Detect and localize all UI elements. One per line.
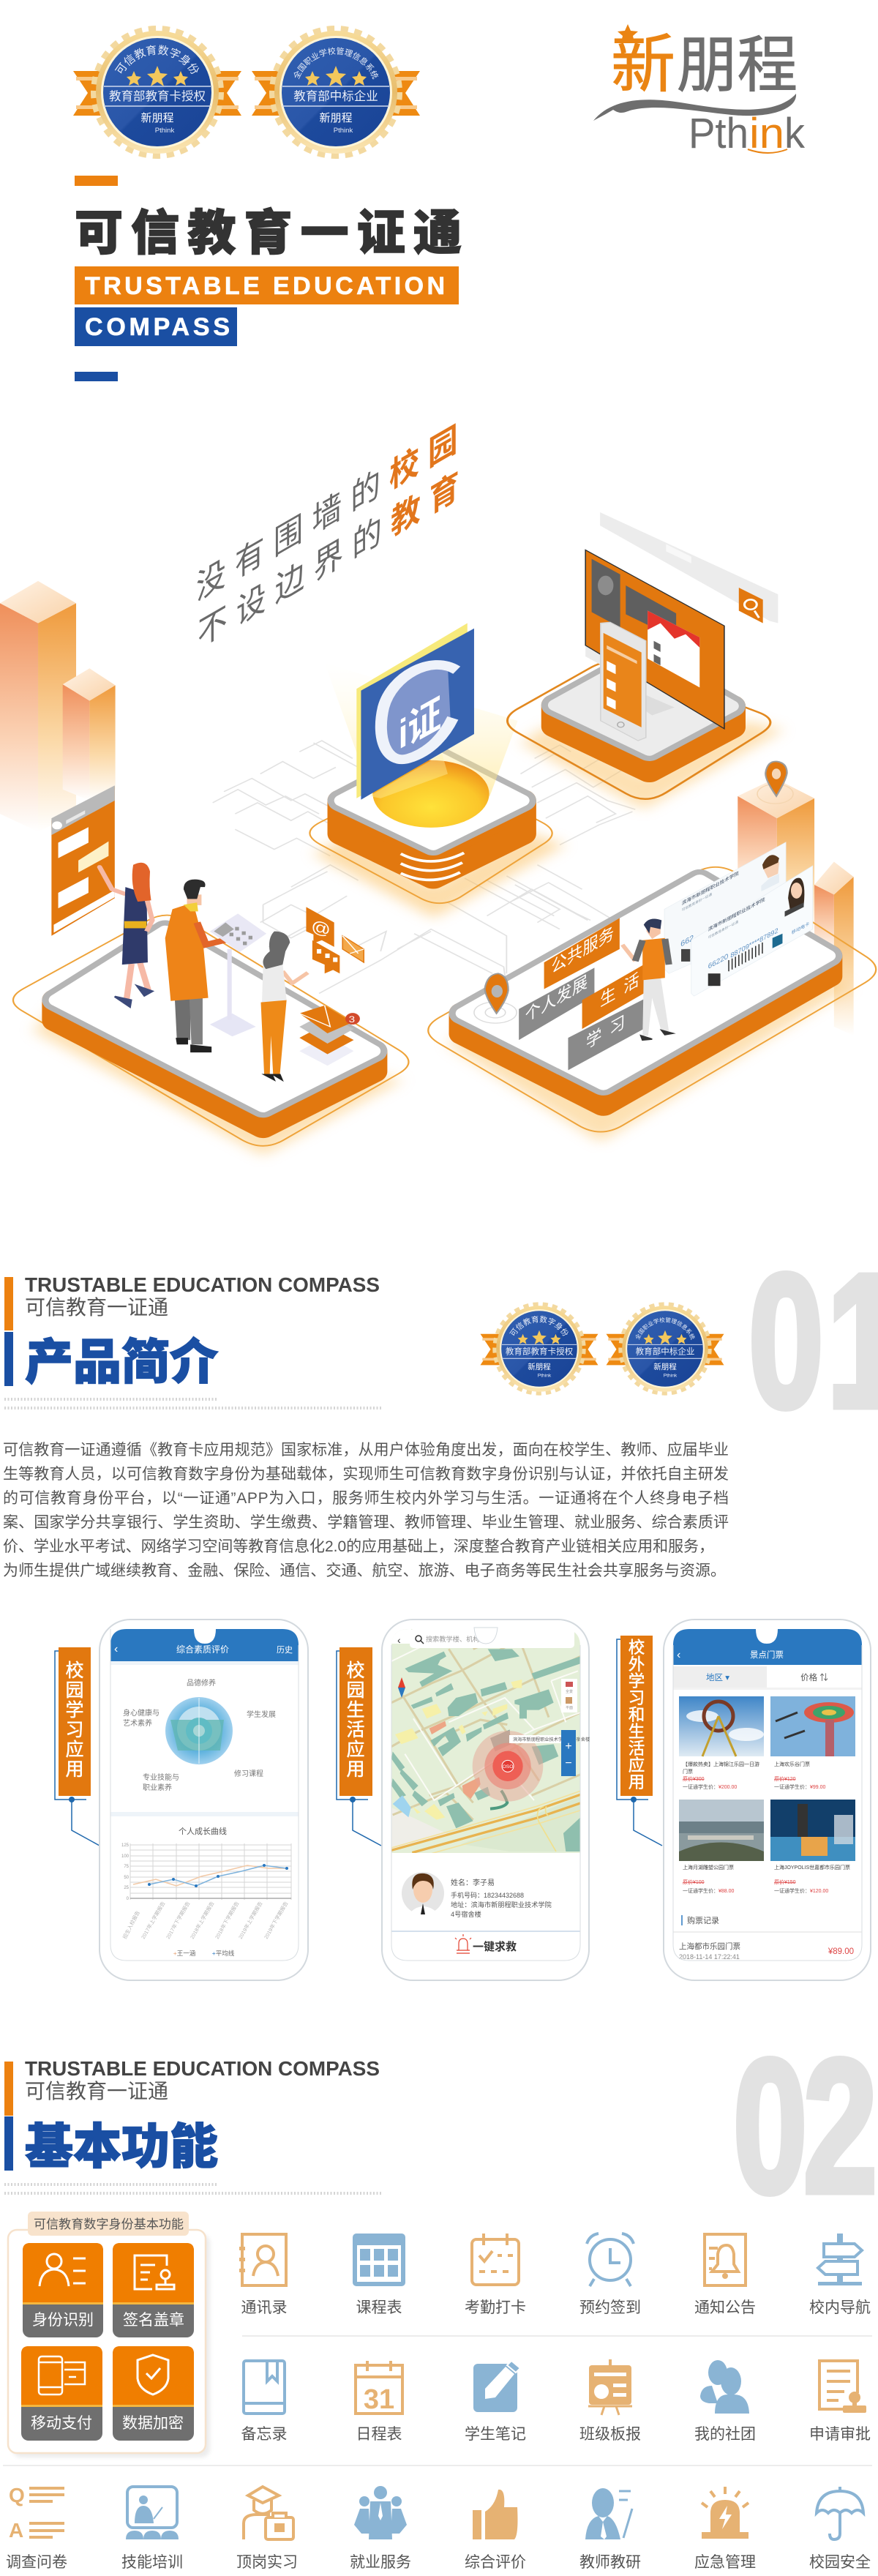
person: man in orange coat — [165, 880, 234, 1052]
label: off-campus apps: 用 — [629, 1773, 645, 1791]
card: digital signature — [113, 2243, 194, 2337]
feature: internship: 顶岗实习 — [236, 2554, 298, 2571]
phone frame — [664, 1620, 871, 1980]
person: man by ID cards — [623, 919, 673, 1040]
panel: core identity functions — [8, 2212, 210, 2457]
circuit lines — [213, 741, 635, 994]
ID card front: 移动电卡 — [792, 920, 810, 936]
ID card back: 662 — [680, 934, 694, 949]
growth line chart: 0 — [127, 1897, 130, 1901]
chart legend: +平均线 — [212, 1950, 235, 1957]
product introduction paragraph: 可信教育一证通遵循《教育卡应用规范》国家标准，从用户体验角度出发，面向在校学生、教师、应届毕业 — [3, 1442, 729, 1459]
badge: tender-winning enterprise: 教育部中标企业 — [293, 89, 378, 103]
feature: campus navigation — [809, 2234, 871, 2316]
growth line chart: 2019年上学期报告 — [237, 1901, 264, 1940]
location callout: 滨海市新朋程职业技术学院第四宿舍楼 — [513, 1737, 590, 1742]
label: off-campus apps: 校 — [629, 1639, 645, 1657]
chinese subtitle: 可信教育一证通 — [25, 2080, 168, 2103]
profile details: 4号宿舍楼 — [451, 1910, 481, 1918]
feature: teaching research: 教师教研 — [579, 2554, 641, 2571]
zoom control — [561, 1730, 576, 1776]
map search bar: ‹ — [397, 1634, 401, 1646]
zoom control: + — [565, 1740, 572, 1753]
label: campus life apps: 生 — [346, 1700, 365, 1721]
feature: my clubs — [694, 2360, 756, 2443]
radar chart — [165, 1697, 233, 1764]
feature: contacts: 通讯录 — [241, 2299, 287, 2316]
profile details: 姓名：李子易 — [451, 1878, 495, 1887]
card: mobile payment: 移动支付 — [31, 2415, 92, 2432]
ID card back — [664, 842, 786, 973]
small badge two: 新朋程 — [653, 1362, 677, 1371]
growth line chart: 2017年上学期报告 — [140, 1901, 167, 1940]
badge: digital identity authorisation — [73, 26, 241, 159]
badge: tender-winning enterprise: 新朋程 — [319, 112, 353, 124]
campus map: OSO — [503, 1764, 513, 1770]
feature: attendance — [465, 2234, 526, 2316]
ticket card: swing ride — [770, 1696, 855, 1790]
logo: Pthink: 朋程 — [677, 31, 798, 100]
ticket card: ferris wheel: 一证通学生价：¥200.00 — [683, 1783, 737, 1790]
service tag: personal development — [519, 967, 594, 1040]
person: woman in navy dress — [100, 863, 152, 1007]
ID card back: 滨海市新朋程职业技术学院 — [682, 869, 739, 907]
isometric illustration — [0, 512, 876, 1156]
service tag: life — [582, 965, 647, 1029]
header badges — [73, 26, 420, 159]
feature: skills training: 技能培训 — [121, 2554, 183, 2571]
feature: survey — [6, 2484, 67, 2571]
label: off-campus apps: 生 — [629, 1723, 645, 1741]
product introduction paragraph: 的可信教育身份平台，以“一证通”APP为入口，服务师生校内外学习与生活。一证通将在个人终身电子档 — [3, 1490, 729, 1507]
feature: survey: 调查问卷 — [6, 2554, 67, 2571]
map layer switch: 全景 — [566, 1689, 573, 1694]
banner: trustable education: TRUSTABLE EDUCATION — [85, 272, 445, 300]
mail stack — [299, 1006, 360, 1066]
phone 2: campus map and SOS — [382, 1620, 590, 1980]
feature: memo: 备忘录 — [241, 2426, 287, 2443]
growth line chart: 招生入校报告 — [121, 1909, 141, 1940]
feature: class bulletin: 班级板报 — [579, 2426, 641, 2443]
slogan: 不设边界的教育 — [198, 460, 468, 655]
feature: teaching research — [579, 2488, 641, 2571]
product introduction paragraph: 为师生提供广域继续教育、金融、保险、通信、交通、航空、旅游、电子商务等民生社会共享服务与资源。 — [3, 1562, 726, 1579]
feature: campus navigation: 校内导航 — [809, 2299, 871, 2316]
chart legend: +王一涵 — [173, 1950, 195, 1957]
growth line chart: 2019年下学期报告 — [263, 1901, 290, 1940]
phone 1: quality evaluation — [100, 1620, 308, 1980]
glowing dome and beam — [325, 663, 518, 828]
search bar — [600, 512, 778, 624]
left chat panel — [51, 785, 115, 936]
left orange towers — [0, 581, 116, 831]
label: off-campus apps: 活 — [629, 1740, 645, 1758]
person: woman in orange trousers — [260, 932, 308, 1080]
service tag: life: 生活 — [600, 965, 647, 1011]
label: campus study apps: 学 — [65, 1700, 84, 1721]
main title: 可信教育一证通 — [75, 206, 462, 260]
profile avatar — [402, 1872, 444, 1914]
banner: trustable education — [75, 266, 459, 304]
card: data encryption: 数据加密 — [122, 2415, 184, 2432]
feature: student notes — [465, 2361, 526, 2443]
section number 02: 02 — [733, 2020, 877, 2233]
feature: notices: 通知公告 — [694, 2299, 756, 2316]
badge: digital identity authorisation: 教育部教育卡授权 — [109, 89, 206, 103]
growth line chart: 50 — [124, 1876, 130, 1880]
feature: skills training — [121, 2487, 183, 2571]
small badge two: Pthink — [664, 1373, 678, 1378]
ticket card: sculpture park — [679, 1800, 764, 1894]
logo: Pthink: in — [749, 110, 784, 157]
feature: survey: Q — [9, 2484, 25, 2506]
small badge two: 全国职业学校管理信息系统 — [635, 1317, 695, 1340]
filter tabs: 价格 ⇅ — [800, 1672, 828, 1682]
ticket card: joypolis — [770, 1800, 855, 1894]
label: campus study apps: 习 — [65, 1720, 84, 1740]
radar labels: 品德修养 — [187, 1678, 216, 1688]
floating message icons — [306, 907, 364, 973]
section 02 heading — [4, 2057, 382, 2193]
label: campus life apps: 园 — [346, 1680, 365, 1701]
profile details: 地址：滨海市新朋程职业技术学院 — [451, 1901, 552, 1909]
map layer switch: 平面 — [566, 1706, 573, 1710]
feature: emergency management: 应急管理 — [694, 2554, 756, 2571]
service tag: personal development: 个人发展 — [525, 972, 588, 1027]
feature: approvals: 申请审批 — [809, 2426, 871, 2443]
mail stack: 3 — [349, 1014, 355, 1025]
logo: Pthink: Pth — [688, 110, 748, 157]
badge: digital identity authorisation: 可信教育数字身份 — [114, 45, 199, 74]
small badge one: 新朋程 — [528, 1362, 551, 1371]
feature: survey: A — [9, 2519, 23, 2542]
card: digital signature: 签名盖章 — [123, 2312, 184, 2329]
radar labels: 艺术素养 — [123, 1718, 152, 1728]
map search bar — [391, 1628, 574, 1648]
section title: 产品简介 — [25, 1335, 218, 1389]
label: campus study apps — [55, 1647, 100, 1846]
monitor — [585, 550, 724, 729]
purchase records — [673, 1915, 862, 1961]
ID card front: 可信教育身份一证通 — [708, 919, 738, 940]
feature: contacts — [239, 2234, 287, 2316]
card: identity recognition: 身份识别 — [32, 2312, 94, 2329]
feature: schedule: 日程表 — [356, 2426, 402, 2443]
app header — [673, 1629, 862, 1665]
right platform — [428, 867, 876, 1142]
feature: memo — [241, 2361, 287, 2443]
radar labels: 身心健康与 — [123, 1708, 160, 1718]
feature: student notes: 学生笔记 — [465, 2426, 526, 2443]
location pin on tower — [757, 761, 793, 804]
service tag: public services — [544, 918, 620, 989]
feature: campus safety — [809, 2487, 871, 2571]
zoom control: − — [565, 1757, 572, 1770]
feature: approvals — [809, 2361, 871, 2443]
accent bars — [4, 2062, 13, 2171]
function grid dividers — [3, 2336, 872, 2465]
ID card front: 66220 — [708, 952, 728, 971]
map layer switch — [561, 1679, 577, 1712]
feature: attendance: 考勤打卡 — [465, 2299, 526, 2316]
campus map — [388, 1625, 585, 1859]
accent bar orange — [75, 176, 118, 186]
banner: compass: COMPASS — [85, 313, 230, 341]
alarm icon — [455, 1934, 471, 1953]
feature: emergency management — [694, 2487, 756, 2571]
label: off-campus apps: 和 — [629, 1706, 645, 1724]
top-right platform — [507, 624, 784, 809]
service tag: public services: 公共服务 — [552, 923, 614, 978]
badge: digital identity authorisation: 新朋程 — [140, 112, 174, 124]
profile details: 手机号码：18234432688 — [451, 1891, 524, 1899]
english subtitle: TRUSTABLE EDUCATION COMPASS — [25, 2057, 380, 2080]
card: mobile payment — [21, 2346, 102, 2441]
ticket card: sculpture park: 一证通学生价：¥88.00 — [683, 1887, 735, 1894]
small badge two: 教育部中标企业 — [636, 1347, 694, 1357]
ticket card: ferris wheel: 【爆款热卖】上海锦江乐园一日游 — [683, 1761, 759, 1767]
card: identity recognition — [23, 2243, 103, 2337]
SOS button text: 一键求救 — [473, 1940, 517, 1953]
badge: digital identity authorisation: Pthink — [155, 127, 174, 135]
english subtitle: TRUSTABLE EDUCATION COMPASS — [25, 1273, 380, 1296]
section title: 基本功能 — [25, 2119, 218, 2174]
chart legend — [173, 1950, 235, 1957]
small badge one: 可信教育数字身份 — [509, 1316, 569, 1336]
product introduction paragraph — [3, 1442, 729, 1579]
floating message icons: @ — [311, 917, 331, 940]
phone 3: attraction tickets: 景点门票 — [750, 1650, 784, 1660]
purchase records: 上海都市乐园门票 — [679, 1942, 740, 1951]
badge: tender-winning enterprise: Pthink — [334, 127, 353, 135]
label: off-campus apps: 外 — [629, 1655, 645, 1674]
small badge two — [606, 1302, 724, 1396]
purchase records: ¥89.00 — [828, 1947, 854, 1956]
ticket card: swing ride: 原价¥120 — [774, 1776, 796, 1782]
ID card back: 可信教育身份一证通 — [682, 892, 712, 913]
logo: Pthink — [593, 24, 806, 157]
right orange towers — [738, 779, 854, 1036]
banner: compass — [75, 307, 237, 346]
label: off-campus apps: 学 — [629, 1672, 645, 1690]
radar labels: 学生发展 — [247, 1710, 276, 1719]
logo: Pthink: k — [784, 110, 806, 157]
badge: tender-winning enterprise: 全国职业学校管理信息系统 — [294, 47, 378, 79]
ticket card: joypolis: 上海JOYPOLIS世嘉都市乐园门票 — [774, 1864, 850, 1871]
ID card front: 88709****87892 — [730, 926, 778, 960]
feature: comprehensive evaluation — [465, 2490, 526, 2571]
service tag: study — [568, 999, 644, 1070]
kiosk terminal — [210, 913, 266, 1036]
feature: schedule — [356, 2361, 402, 2443]
filter tabs — [673, 1666, 862, 1690]
purchase records: 购票记录 — [687, 1915, 719, 1925]
location callout — [509, 1735, 590, 1743]
radar labels: 职业素养 — [143, 1783, 172, 1792]
growth line chart: 2017年下学期报告 — [165, 1901, 192, 1940]
purchase records: 2018-11-14 17:22:41 — [679, 1953, 740, 1961]
service tag: study: 学习 — [586, 1007, 633, 1053]
location pin on platform — [474, 973, 517, 1023]
phone 3: attraction tickets — [664, 1620, 871, 1980]
phone frame — [100, 1620, 308, 1980]
phone 1: quality evaluation: 综合素质评价 — [176, 1644, 229, 1655]
ticket card: ferris wheel — [679, 1696, 764, 1790]
product introduction paragraph: 案、国家学分共享银行、学生资助、学生缴费、学籍管理、教师管理、毕业生管理、就业服务、综合素质评 — [3, 1514, 729, 1531]
phone 1: quality evaluation: ‹ — [114, 1643, 118, 1655]
feature: class bulletin — [579, 2359, 641, 2443]
card: data encryption — [113, 2346, 194, 2441]
compass — [398, 1677, 405, 1698]
label: off-campus apps: 习 — [629, 1689, 645, 1707]
label: campus study apps: 用 — [65, 1759, 84, 1780]
feature: timetable — [353, 2234, 405, 2316]
dotted rules — [4, 2184, 382, 2193]
logo: Pthink: 新 — [611, 28, 675, 100]
ticket card: sculpture park: 上海月湖雕塑公园门票 — [683, 1864, 734, 1871]
phone 3: attraction tickets: ‹ — [677, 1649, 680, 1661]
ticket card: swing ride: 一证通学生价：¥99.00 — [774, 1783, 826, 1790]
feature: schedule: 31 — [364, 2384, 394, 2415]
ticket card: swing ride: 上海欢乐谷门票 — [774, 1761, 810, 1767]
small badges — [480, 1302, 724, 1396]
label: off-campus apps: 应 — [629, 1756, 645, 1775]
ticket card: sculpture park: 原价¥100 — [683, 1879, 705, 1885]
accent bar blue — [75, 372, 118, 381]
left platform — [13, 916, 408, 1156]
chinese subtitle: 可信教育一证通 — [25, 1296, 168, 1319]
label: campus life apps: 应 — [346, 1740, 365, 1760]
feature: timetable: 课程表 — [356, 2299, 402, 2316]
feature: internship — [236, 2487, 298, 2571]
slogan: 没有围墙的校园 — [196, 413, 467, 608]
label: campus life apps: 用 — [346, 1759, 365, 1780]
product introduction paragraph: 价、学业水平考试、网络学习空间等教育信息化2.0的应用基础上，深度整合教育产业链相关应用和服务， — [3, 1538, 714, 1555]
small badge one — [480, 1302, 599, 1396]
centre platform — [309, 754, 566, 918]
label: campus life apps: 校 — [346, 1660, 365, 1681]
phone frame — [382, 1620, 589, 1980]
ticket card: joypolis: 原价¥150 — [774, 1879, 796, 1885]
label: campus life apps: 活 — [346, 1720, 365, 1740]
app header — [110, 1629, 299, 1661]
accent bars — [4, 1277, 13, 1386]
feature: my clubs: 我的社团 — [694, 2426, 756, 2443]
label: campus study apps: 校 — [65, 1660, 84, 1681]
label: campus study apps: 园 — [65, 1680, 84, 1701]
radar labels: 专业技能与 — [143, 1772, 179, 1782]
growth line chart — [121, 1843, 291, 1940]
panel tag — [28, 2212, 189, 2236]
section 01 heading — [4, 1273, 382, 1408]
feature: comprehensive evaluation: 综合评价 — [465, 2554, 526, 2571]
growth line chart: 2018年上学期报告 — [189, 1901, 216, 1940]
panel tag: 可信教育数字身份基本功能 — [34, 2217, 184, 2231]
growth line chart: 75 — [124, 1865, 130, 1869]
growth line chart: 25 — [124, 1886, 130, 1890]
feature: campus safety: 校园安全 — [809, 2554, 871, 2571]
growth line chart: 100 — [121, 1854, 130, 1859]
ticket card: joypolis: 一证通学生价：¥120.00 — [774, 1887, 828, 1894]
feature: reservation check-in — [579, 2234, 641, 2316]
label: campus study apps: 应 — [65, 1740, 84, 1760]
map search bar: 搜索教学楼、机构 — [426, 1635, 480, 1643]
phone in monitor scene — [601, 622, 646, 741]
ticket card: ferris wheel: 门票 — [683, 1768, 693, 1775]
ticket card: ferris wheel: 原价¥300 — [683, 1776, 705, 1782]
small badge one: Pthink — [538, 1373, 552, 1378]
ID card front: 滨海市新朋程职业技术学院 — [708, 896, 765, 933]
dotted rules — [4, 1399, 382, 1408]
certificate emblem — [356, 624, 474, 800]
filter tabs: 地区 ▾ — [706, 1673, 729, 1682]
certificate emblem: i证 — [399, 691, 441, 758]
growth line chart: 2018年下学期报告 — [214, 1901, 241, 1940]
radar labels: 修习课程 — [234, 1769, 263, 1778]
label: campus life apps — [337, 1647, 381, 1846]
radar labels — [123, 1678, 276, 1792]
growth line chart: 125 — [121, 1843, 130, 1848]
small badge one: 教育部教育卡授权 — [506, 1347, 574, 1357]
label: off-campus apps — [617, 1636, 662, 1846]
growth chart title: 个人成长曲线 — [179, 1826, 227, 1836]
ID card front — [691, 866, 813, 996]
feature: reservation check-in: 预约签到 — [579, 2299, 641, 2316]
feature: notices — [694, 2234, 756, 2316]
feature: employment services — [350, 2486, 411, 2571]
phone 1: quality evaluation: 历史 — [277, 1645, 293, 1655]
feature: employment services: 就业服务 — [350, 2554, 411, 2571]
product introduction paragraph: 生等教育人员，以可信教育数字身份为基础载体，实现师生可信教育数字身份识别与认证，并依托自主研发 — [3, 1466, 729, 1483]
badge: tender-winning enterprise — [252, 26, 420, 159]
profile details — [451, 1878, 552, 1918]
